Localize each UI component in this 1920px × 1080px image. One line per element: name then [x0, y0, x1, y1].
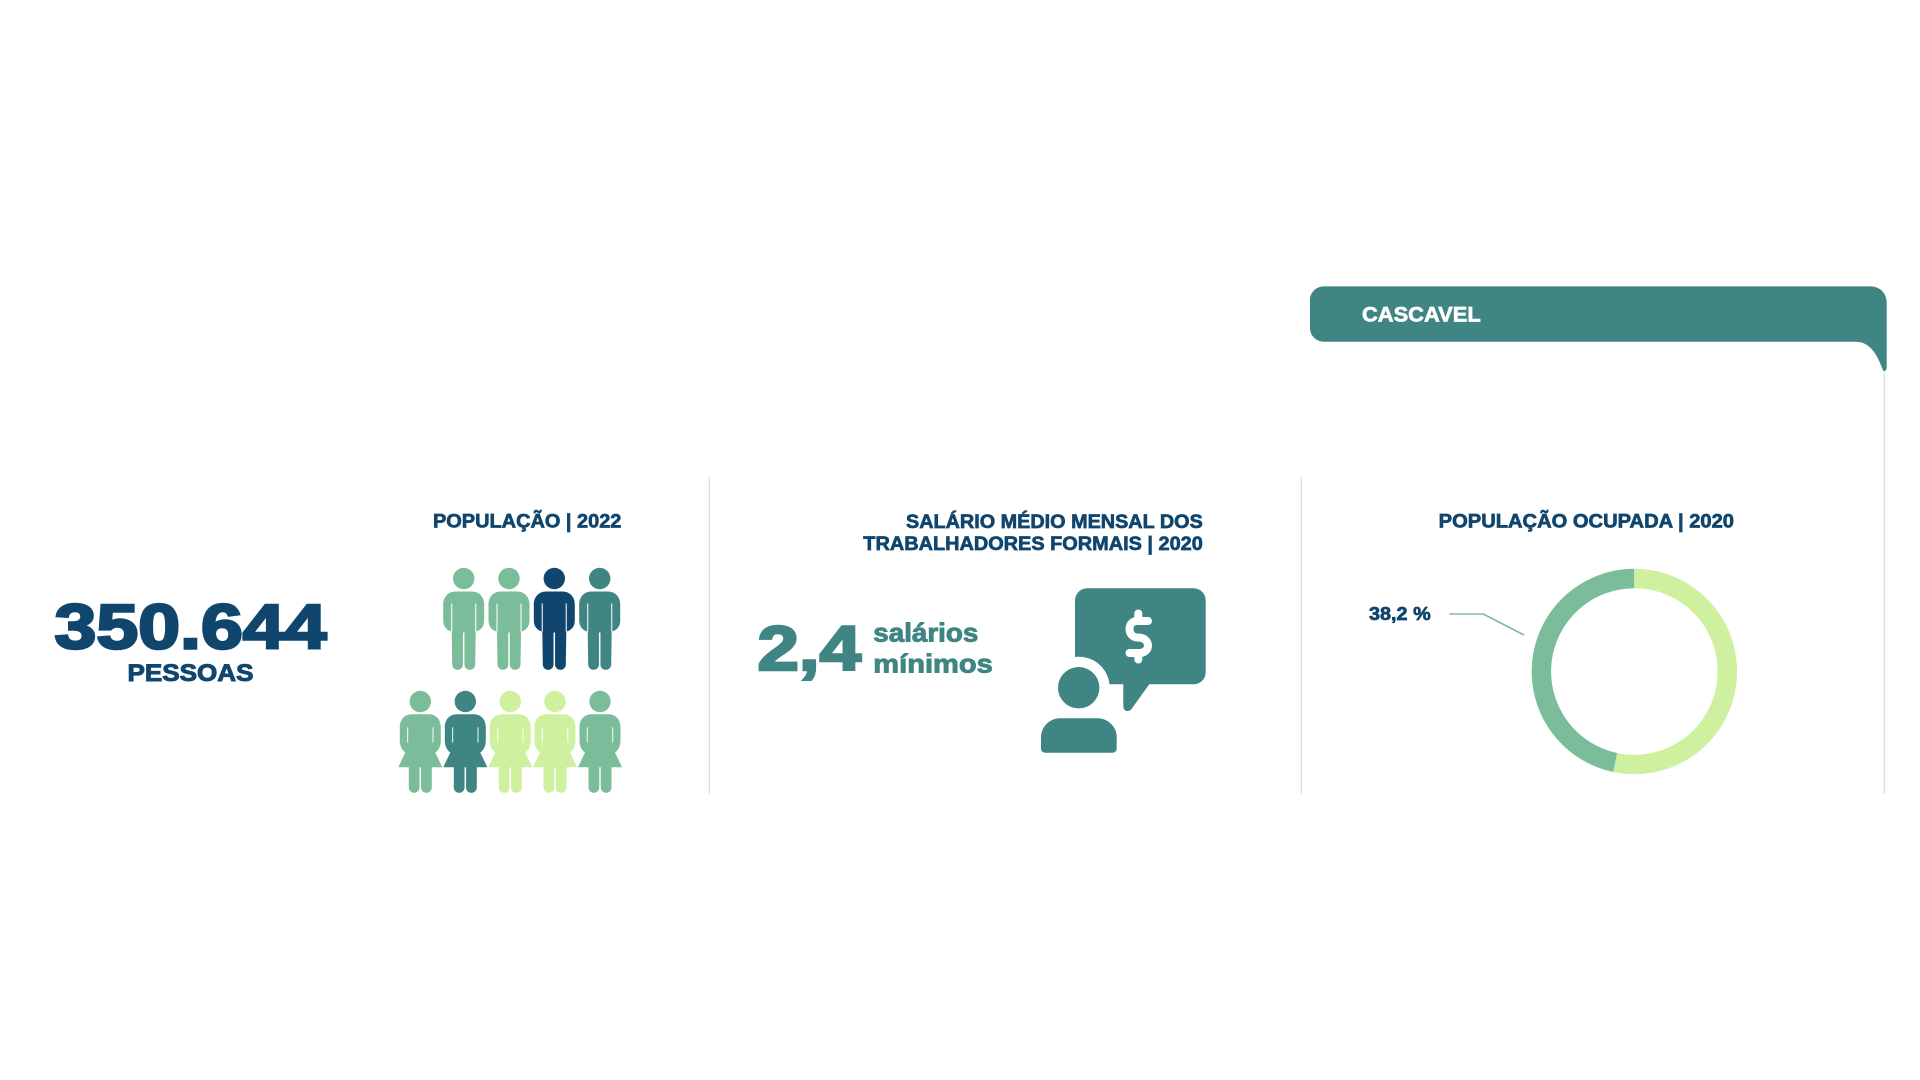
- donut chart: [1541, 578, 1727, 764]
- panel: average salary: [758, 510, 1206, 753]
- salary unit: salários: [873, 618, 978, 648]
- donut value label: 38,2 %: [1369, 603, 1431, 624]
- salary unit: [873, 618, 993, 678]
- band title: CASCAVEL: [1362, 303, 1481, 327]
- panel: population: [54, 510, 622, 793]
- pictogram: women row: [398, 691, 622, 793]
- salary heading: [863, 510, 1203, 555]
- population heading: POPULAÇÃO | 2022: [433, 510, 622, 533]
- population unit: PESSOAS: [128, 660, 254, 687]
- leader line: [1449, 614, 1524, 635]
- salary heading: SALÁRIO MÉDIO MENSAL DOS: [906, 510, 1203, 533]
- panel: employed population: [1369, 510, 1734, 764]
- salary value: 2,4: [758, 614, 861, 684]
- salary heading: TRABALHADORES FORMAIS | 2020: [863, 533, 1203, 555]
- employed heading: POPULAÇÃO OCUPADA | 2020: [1439, 510, 1734, 533]
- population total: 350.644: [54, 593, 326, 663]
- salary unit: mínimos: [873, 648, 993, 678]
- pictogram: men row: [443, 568, 620, 670]
- icon: person with money speech bubble: [1041, 588, 1206, 753]
- header band: Cascavel: [1310, 286, 1887, 371]
